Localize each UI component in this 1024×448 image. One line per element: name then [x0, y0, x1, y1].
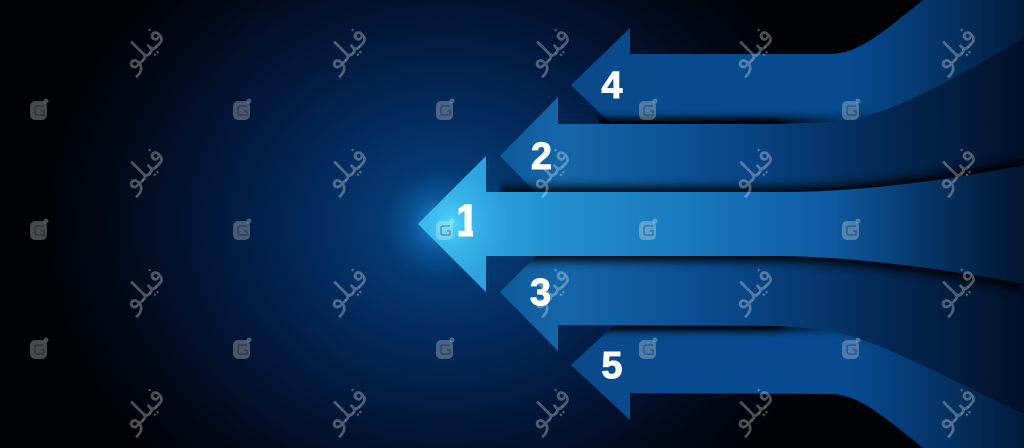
shadow on arrow 5 — [603, 325, 862, 340]
watermark: wordmarks: فيلو — [924, 139, 985, 199]
number 3: 3 — [530, 272, 551, 314]
number 5: 5 — [601, 345, 623, 387]
arrow 1 hot spot — [418, 156, 520, 292]
watermark: wordmarks: فيلو — [112, 379, 173, 439]
watermark: wordmarks: فيلو — [924, 259, 985, 319]
watermark: wordmarks: فيلو — [518, 259, 579, 319]
watermark: wordmarks: فيلو — [518, 379, 579, 439]
watermark: wordmarks: فيلو — [924, 19, 985, 79]
shadow on arrow 3 — [524, 256, 1024, 292]
arrow 3 — [500, 234, 1024, 414]
arrow 2 — [500, 38, 1024, 215]
watermark: wordmarks: فيلو — [721, 139, 782, 199]
shadow on arrow 2 — [500, 156, 1024, 192]
arrow 4 — [571, 0, 1024, 160]
watermark: wordmarks: فيلو — [112, 259, 173, 319]
watermark: wordmarks: فيلو — [721, 379, 782, 439]
watermark: wordmarks: فيلو — [315, 139, 376, 199]
arrow 5 — [571, 290, 1024, 448]
watermark: logo badges — [30, 98, 860, 359]
watermark: wordmarks: فيلو — [721, 259, 782, 319]
shadow on arrow 4 — [594, 109, 873, 124]
watermark: wordmarks: فيلو — [518, 139, 579, 199]
watermark: wordmarks: فيلو — [112, 19, 173, 79]
number 1: 1 — [454, 195, 480, 246]
watermark: wordmarks: فيلو — [924, 379, 985, 439]
watermark: wordmarks: فيلو — [112, 139, 173, 199]
arrow 1 — [418, 156, 1024, 292]
watermark: wordmarks: فيلو — [518, 19, 579, 79]
watermark: wordmarks: فيلو — [721, 19, 782, 79]
watermark: wordmarks: فيلو — [315, 19, 376, 79]
number 2: 2 — [531, 136, 552, 178]
arrow 1 glow — [382, 168, 494, 280]
number 4: 4 — [601, 65, 623, 107]
watermark: wordmarks: فيلو — [315, 379, 376, 439]
watermark: wordmarks: فيلو — [315, 259, 376, 319]
